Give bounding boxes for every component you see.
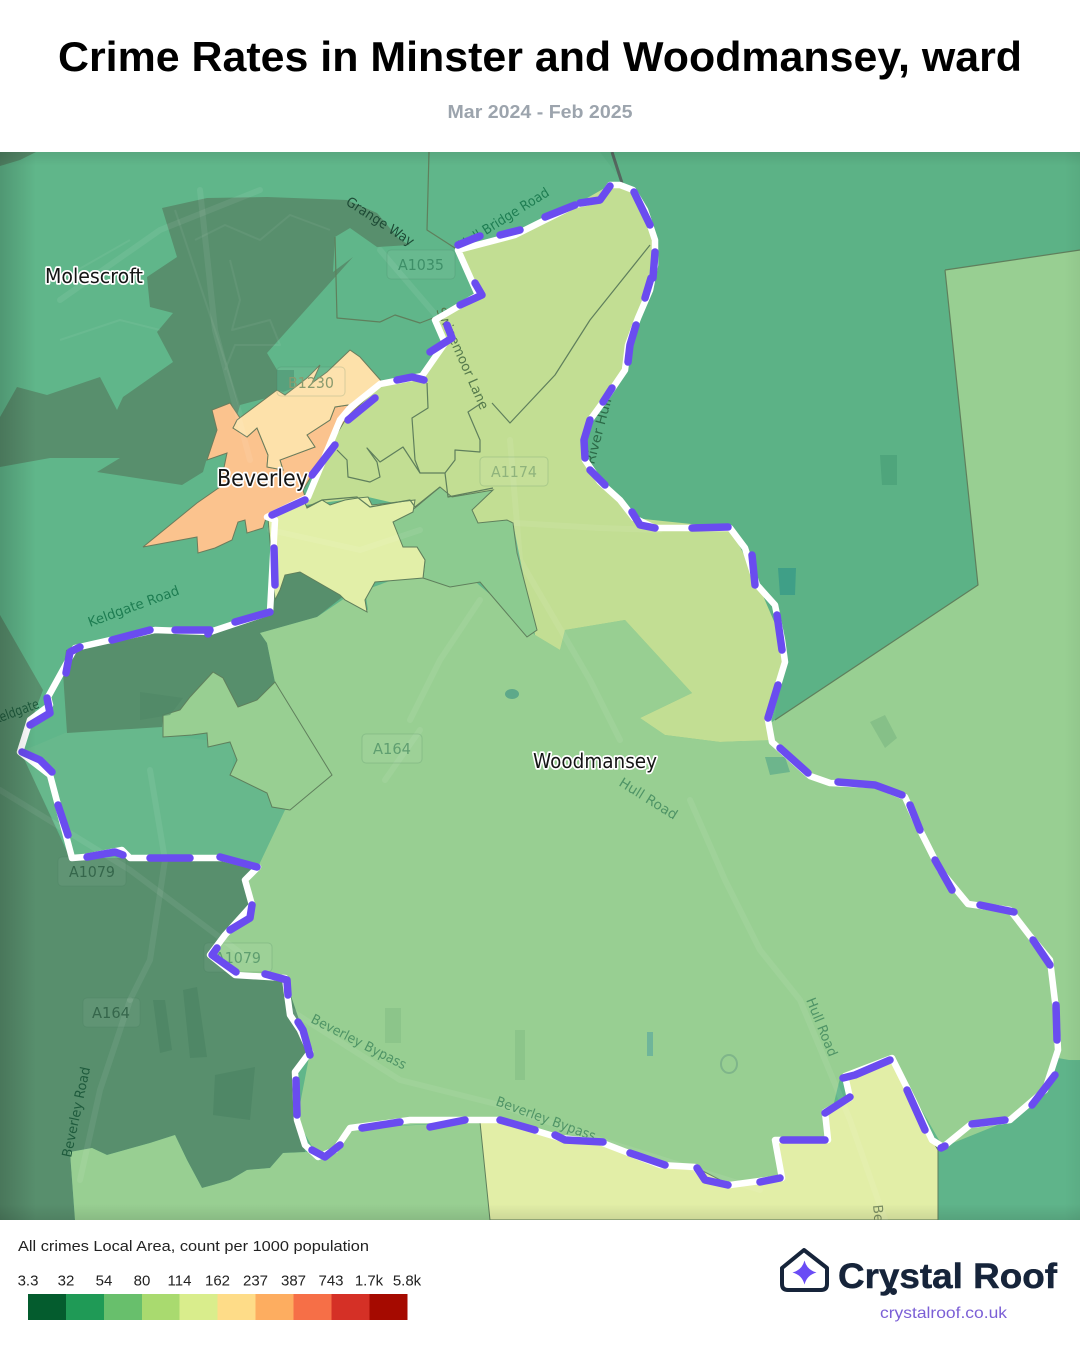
area: north lime ward	[305, 185, 785, 742]
place label: Woodmansey: Woodmansey	[533, 749, 657, 773]
ward boundary: purple dashes	[22, 186, 1057, 1185]
road name labels: River Hull	[582, 396, 615, 466]
road shield: A1035: A1035	[398, 256, 444, 274]
legend colour swatches	[28, 1294, 408, 1320]
place label: Molescroft: Molescroft	[45, 264, 143, 288]
area: cream Beverley	[233, 350, 383, 470]
place label: Beverley: Beverley	[217, 466, 308, 492]
fields and water patches	[140, 455, 897, 1120]
road name labels: Beverley Bypass	[308, 1011, 409, 1073]
road name labels: Beverley Bypass	[494, 1094, 598, 1145]
area: east mid-green	[585, 152, 1080, 720]
road network	[0, 190, 885, 1220]
road name labels: Hull Road	[802, 996, 840, 1059]
road name labels: Hull Bridge Road	[456, 185, 552, 253]
road shield: A1174: A1174	[491, 463, 537, 481]
road shield: A1079 west: A1079	[69, 863, 115, 881]
area: south pale yellow-green	[480, 1058, 938, 1220]
legend scale values: 54	[96, 1272, 112, 1290]
road name labels: Keldgate Road	[86, 583, 182, 631]
logo wordmark: Crystal Roof	[838, 1257, 1057, 1296]
icon: house with star	[782, 1250, 827, 1290]
Molescroft street lines	[60, 210, 330, 416]
legend scale values: 5.8k	[393, 1272, 422, 1290]
legend scale values: 743	[318, 1272, 344, 1290]
road name labels	[0, 185, 886, 1223]
ward boundary: white line	[20, 185, 1058, 1185]
choropleth map	[0, 152, 1080, 1223]
area: west inner light green	[163, 672, 332, 810]
logo: Crystal Roof	[782, 1250, 1057, 1322]
road name labels: Hull Road	[616, 775, 680, 823]
road shield: A164 south	[92, 998, 132, 1018]
road shield: A164 south: A164	[92, 1004, 130, 1022]
road shield: A1174	[480, 457, 548, 486]
legend scale values: 3.3	[18, 1272, 38, 1290]
area: east light green	[747, 250, 1080, 1140]
area: peach Beverley	[143, 403, 348, 553]
legend scale values: 1.7k	[355, 1272, 384, 1290]
legend scale values: 32	[58, 1272, 74, 1290]
neighbourhood boundary lines	[307, 152, 1080, 720]
road shield: A164 north: A164	[373, 740, 411, 758]
legend scale values: 80	[134, 1272, 150, 1290]
road shield: A1035	[387, 250, 455, 279]
legend scale values: 162	[205, 1272, 230, 1290]
area: Molescroft dark green	[0, 197, 410, 485]
area: Woodmansey light green	[217, 578, 998, 1182]
area: west ward green	[20, 712, 290, 867]
legend title: All crimes Local Area, count per 1000 population	[18, 1239, 369, 1255]
legend scale values: 237	[243, 1272, 268, 1290]
area: pale centre	[268, 497, 425, 612]
area: keldgate dark green	[63, 565, 345, 733]
logo descender dot	[890, 1288, 897, 1295]
legend scale values: 114	[168, 1272, 191, 1290]
map edge shading	[0, 152, 1080, 1220]
title: Crime Rates in Minster and Woodmansey, ward	[58, 33, 1022, 80]
website link: crystalroof.co.uk	[880, 1305, 1008, 1322]
road name labels: Be	[869, 1204, 886, 1223]
legend	[18, 1239, 422, 1320]
road name labels: Beverley Road	[59, 1066, 94, 1159]
road shield: A164 north	[362, 734, 422, 763]
area: small dark block by B1230	[277, 370, 294, 392]
road name labels: Grange Way	[343, 194, 417, 250]
road shield: B1230	[277, 367, 345, 396]
area: south-west dark green	[0, 615, 310, 1220]
area: teal-green patch	[393, 487, 537, 637]
map base: mid green areas	[0, 152, 1080, 1220]
road shield: A1079 south	[218, 942, 272, 972]
road shield: A1079 south: A1079	[215, 949, 261, 967]
area: top-left corner dark patch	[0, 152, 36, 166]
area: south-east mid green	[954, 1058, 1068, 1143]
area: south bottom light green	[70, 1122, 490, 1220]
subtitle: date range: Mar 2024 - Feb 2025	[448, 102, 632, 122]
road shield: B1230: B1230	[288, 374, 334, 392]
legend scale values: 387	[281, 1272, 306, 1290]
legend scale values	[18, 1272, 422, 1290]
road name labels: Swinemoor Lane	[432, 305, 492, 412]
road shield: A1079 west	[69, 856, 118, 877]
